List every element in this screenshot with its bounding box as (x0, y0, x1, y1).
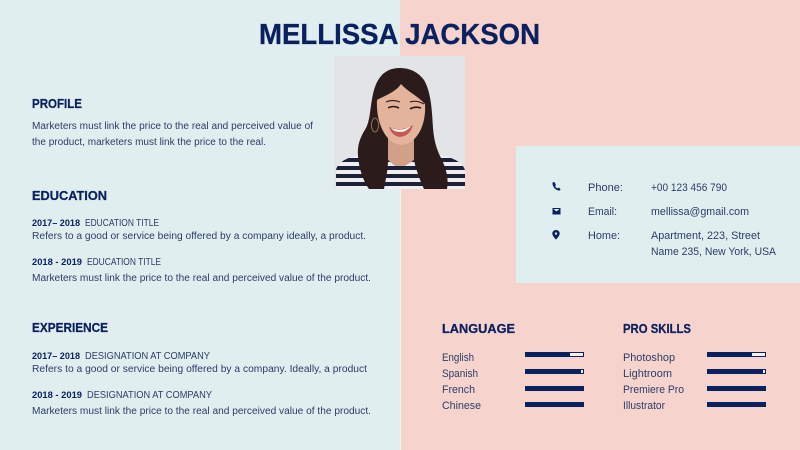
right background panel (400, 0, 800, 450)
education entry 1: 2017– 2018 (32, 218, 81, 229)
contact panel: Name 235, New York, USA (651, 246, 777, 258)
experience section: Marketers must link the price to the real and perceived value of the product. (32, 406, 371, 417)
contact values: +00 123 456 790 (651, 182, 727, 194)
left background panel (0, 0, 400, 450)
contact panel (516, 146, 800, 283)
experience entry 1: 2017– 2018 (32, 351, 81, 362)
language: Spanish: Spanish (442, 368, 478, 380)
language heading: LANGUAGE (442, 321, 515, 336)
language: English: English (442, 352, 474, 364)
education section: Refers to a good or service being offered by a company ideally, a product. (32, 231, 366, 242)
education heading: EDUCATION (32, 188, 107, 203)
icon: email (552, 208, 560, 214)
pro skills section (623, 321, 766, 412)
title: MELLISSA JACKSON (259, 19, 540, 51)
experience section: DESIGNATION AT COMPANY (87, 390, 212, 401)
experience heading: EXPERIENCE (32, 320, 108, 335)
language section (442, 321, 584, 412)
experience section (32, 320, 371, 417)
skill: Lightroom: Lightroom (623, 368, 672, 380)
profile section (32, 96, 313, 148)
profile text: Marketers must link the price to the real and perceived value of (32, 121, 313, 132)
education section: EDUCATION TITLE (85, 218, 159, 229)
experience section: DESIGNATION AT COMPANY (85, 351, 210, 362)
pro skills heading: PRO SKILLS (623, 321, 691, 336)
profile section: the product, marketers must link the price to the real. (32, 137, 266, 148)
skill: Photoshop: Photoshop (623, 352, 675, 364)
center divider line (400, 189, 401, 450)
education entry 2: 2018 - 2019 (32, 257, 82, 268)
language: French: French (442, 384, 475, 396)
icon: phone (552, 182, 560, 191)
education section (32, 188, 371, 284)
experience entry 2: 2018 - 2019 (32, 390, 82, 401)
skill: Premiere Pro: Premiere Pro (623, 384, 684, 396)
education section: EDUCATION TITLE (87, 257, 161, 268)
education section: Marketers must link the price to the real and perceived value of the product. (32, 273, 371, 284)
icon: location pin (552, 230, 560, 240)
portrait photo (334, 56, 465, 189)
contact panel: Home: (588, 230, 620, 242)
contact labels: Phone: (588, 182, 623, 194)
language: Chinese: Chinese (442, 400, 481, 412)
contact panel: Email: (588, 206, 617, 218)
experience section: Refers to a good or service being offered by a company. Ideally, a product (32, 364, 367, 375)
skill: Illustrator: Illustrator (623, 400, 665, 412)
contact panel: mellissa@gmail.com (651, 206, 749, 218)
profile heading: PROFILE (32, 96, 82, 111)
contact panel: Apartment, 223, Street (651, 230, 760, 242)
